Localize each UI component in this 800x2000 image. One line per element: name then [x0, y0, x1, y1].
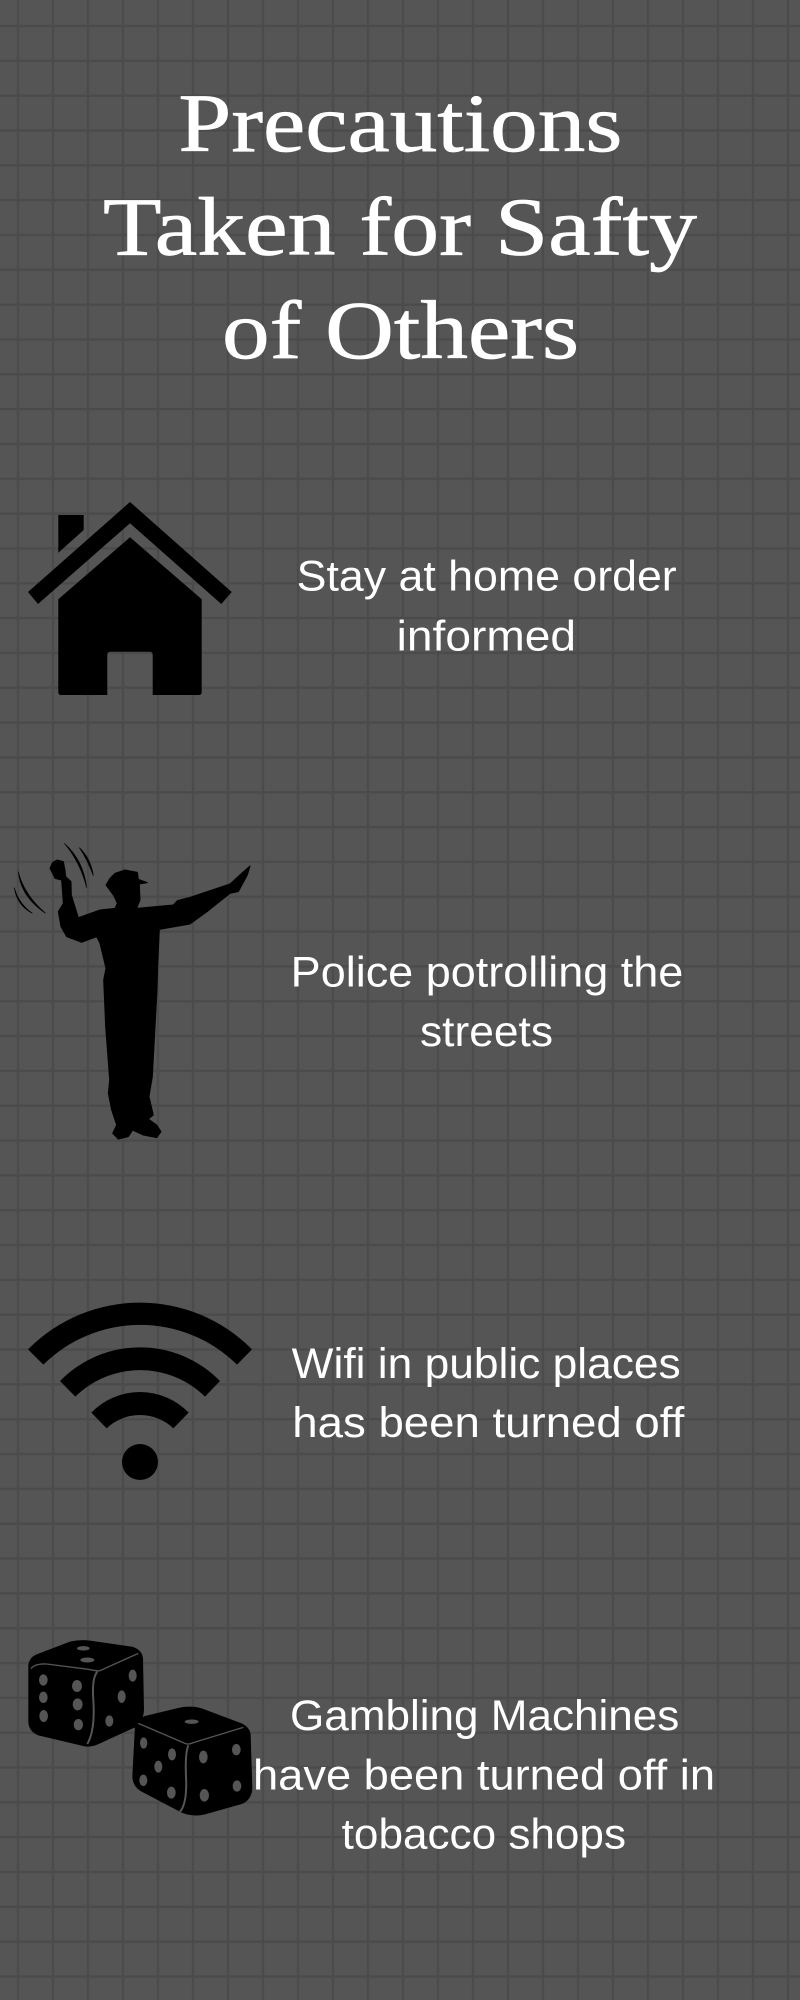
row 3: wifi — [28, 1303, 685, 1480]
icon: house — [28, 502, 232, 695]
text: stay at home order informed — [297, 553, 677, 661]
row 1: stay at home — [28, 502, 677, 695]
icon: police officer silhouette — [14, 843, 250, 1139]
text: gambling machines turned off: tobacco shops — [342, 1810, 626, 1858]
text: stay at home order informed: informed — [397, 613, 576, 661]
icon: dice — [28, 1640, 252, 1816]
text: gambling machines turned off: have been turned off in — [253, 1751, 715, 1799]
text: wifi turned off: Wifi in public places — [292, 1340, 681, 1388]
text: stay at home order informed: Stay at home order — [297, 553, 677, 601]
die right — [132, 1707, 252, 1816]
title: of Others — [222, 284, 579, 376]
text: gambling machines turned off: Gambling Machines — [290, 1692, 679, 1740]
text: gambling machines turned off — [253, 1692, 715, 1858]
row 2: police — [14, 843, 683, 1139]
die left — [28, 1640, 144, 1747]
icon: wifi — [28, 1303, 252, 1480]
title: Precautions — [178, 77, 622, 169]
text: police potrolling the streets: Police potrolling the — [291, 949, 683, 997]
text: wifi turned off: has been turned off — [292, 1399, 685, 1447]
row 4: gambling — [28, 1640, 715, 1858]
text: police potrolling the streets — [291, 949, 683, 1056]
text: wifi turned off — [292, 1340, 685, 1447]
title — [103, 77, 698, 376]
title: Taken for Safty — [103, 180, 698, 272]
text: police potrolling the streets: streets — [420, 1008, 553, 1056]
